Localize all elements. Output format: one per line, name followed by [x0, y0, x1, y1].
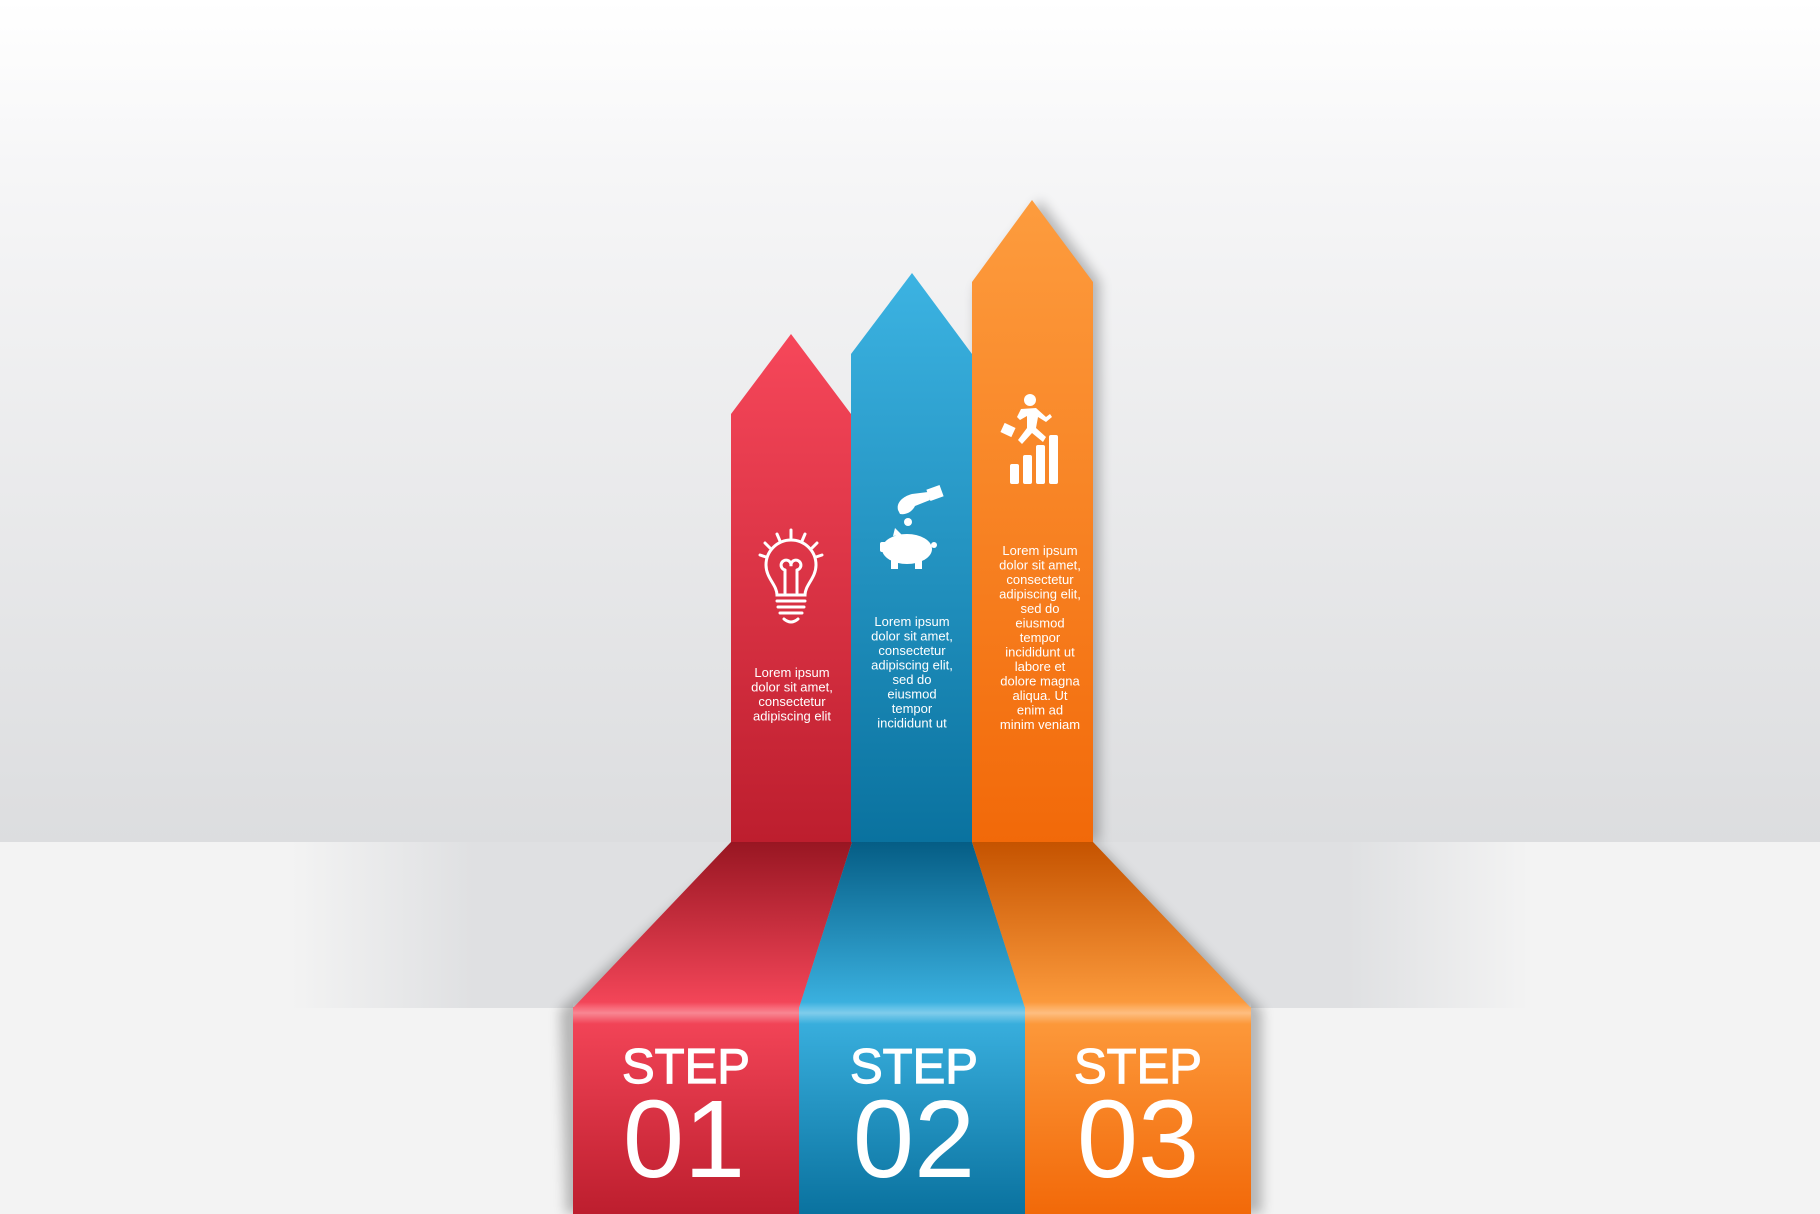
background floor	[0, 842, 1820, 1008]
text: step 02 description: incididunt ut	[877, 716, 947, 730]
ribbon floor: slanted parts	[573, 842, 1251, 1008]
text: step 02 description: adipiscing elit,	[871, 658, 953, 672]
step 03 front panel	[1025, 1007, 1251, 1214]
text: step 02 description: sed do	[892, 672, 932, 687]
text: step 02 description: dolor sit amet,	[871, 628, 953, 644]
text: step 02 description: Lorem ipsum	[874, 614, 950, 629]
text: step 03 description: aliqua. Ut	[1013, 688, 1068, 703]
text: step 03 description: eiusmod	[1015, 616, 1065, 630]
text: step 03 description: enim ad	[1017, 702, 1063, 718]
text: step 02 description: eiusmod	[887, 686, 937, 702]
arrow: step 03 (orange)	[972, 200, 1093, 842]
text: step 03 description: dolor sit amet,	[999, 558, 1081, 572]
step 03 front panel: 03	[1077, 1078, 1199, 1201]
text: step 03 description: adipiscing elit,	[999, 586, 1081, 602]
text: step 02 description: tempor	[892, 701, 933, 716]
step 03 front panel: STEP	[1074, 1040, 1202, 1094]
step 01 front panel	[573, 1007, 799, 1214]
shadows	[560, 200, 1262, 1214]
text: step 03 description: consectetur	[1006, 572, 1074, 587]
step 02 front panel: 02	[853, 1078, 975, 1201]
text: step 02 description: consectetur	[878, 643, 946, 658]
arrow: step 02 (blue)	[851, 273, 972, 842]
text: step 01 description: dolor sit amet,	[751, 680, 833, 694]
background wall	[0, 0, 1820, 842]
icon: piggy bank	[880, 485, 944, 569]
text: step 03 description: minim veniam	[1000, 717, 1080, 732]
text: step 03 description: incididunt ut	[1005, 644, 1075, 660]
step 01 front panel: STEP	[622, 1040, 750, 1094]
step 01 front panel: 01	[623, 1078, 745, 1201]
arrow: step 01 (red)	[731, 334, 851, 842]
text: step 01 description: consectetur	[758, 694, 826, 709]
text: step 01 description: Lorem ipsum	[754, 665, 830, 680]
text: step 03 description: Lorem ipsum	[1002, 543, 1078, 558]
step 02 front panel: STEP	[850, 1040, 978, 1094]
text: step 03 description: sed do	[1020, 601, 1060, 616]
text: step 01 description: adipiscing elit	[753, 708, 831, 724]
text: step 03 description: labore et	[1015, 659, 1066, 674]
step 02 front panel	[799, 1007, 1025, 1214]
text: step 03 description: tempor	[1020, 630, 1061, 645]
icon: light bulb	[760, 530, 822, 622]
icon: runner on bar chart	[1000, 394, 1058, 484]
text: step 03 description: dolore magna	[1000, 674, 1081, 688]
